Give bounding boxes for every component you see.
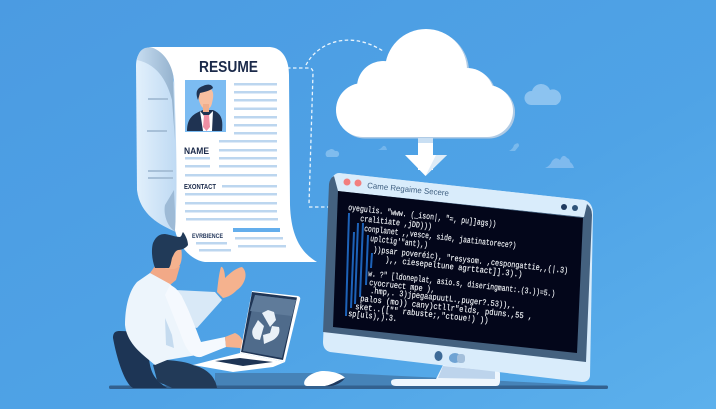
label: EXONTACT: EXONTACT xyxy=(184,184,217,191)
dashed connector: resume to cloud xyxy=(287,40,383,207)
laptop xyxy=(193,291,300,372)
code text: .hmp,. 3)jpegaapuutL.,puger?.53)),. xyxy=(370,286,516,311)
resume photo xyxy=(185,80,226,132)
code text: ),, ciesepeltune agrttact]].3).) xyxy=(385,255,523,280)
hair xyxy=(152,232,188,268)
small background clouds xyxy=(326,84,574,168)
laptop base xyxy=(193,353,285,372)
raised hand xyxy=(217,267,246,298)
laptop keyboard xyxy=(215,358,273,366)
experience highlight bar xyxy=(233,228,280,232)
code text: oyegulis. "www. (_ison|, "=, pu]]ags)) xyxy=(348,203,497,230)
monitor body xyxy=(323,173,593,382)
monitor title bar xyxy=(338,173,586,217)
paper sheet xyxy=(150,47,317,262)
code text xyxy=(348,203,569,326)
mouse xyxy=(304,371,345,386)
code text: palos (mo)) cany)ctllr"elds, pduns.,55 , xyxy=(360,294,533,322)
code text: cralitiate ,jDD))) xyxy=(360,214,432,232)
chair xyxy=(113,331,167,388)
curl of the scroll xyxy=(136,47,180,232)
heading: RESUME: RESUME xyxy=(199,59,258,76)
code text: cyocruect mpe ), xyxy=(369,278,435,295)
monitor stand xyxy=(391,365,500,386)
laptop screen xyxy=(243,295,296,358)
trousers xyxy=(153,360,217,388)
resume body lines xyxy=(185,83,286,252)
recycle icon on laptop xyxy=(252,310,279,344)
window dots xyxy=(561,204,578,211)
label: EVRBIENCE: EVRBIENCE xyxy=(192,233,224,240)
person at laptop xyxy=(113,232,246,388)
window title: Came Regaime Secere xyxy=(367,181,450,198)
code text: conplanet ,,vesce, side, jaatinatorece?) xyxy=(364,224,517,251)
far arm sleeve xyxy=(175,290,222,328)
code text: uplctig'"ant),) xyxy=(370,234,428,250)
desk surface xyxy=(109,373,608,389)
arrow: cloud to monitor xyxy=(405,138,447,176)
window buttons xyxy=(344,178,362,186)
cloud xyxy=(336,29,515,138)
laptop lid xyxy=(240,291,300,362)
near hand xyxy=(225,333,245,353)
black screen xyxy=(333,191,583,353)
resume document xyxy=(136,47,317,262)
label: NAME: NAME xyxy=(184,146,209,156)
monitor xyxy=(323,173,593,386)
code text: sp[uls),).3. xyxy=(348,309,397,324)
face xyxy=(165,245,182,269)
monitor dark frame xyxy=(323,176,592,362)
code gutter bars xyxy=(345,213,373,316)
curl text lines xyxy=(147,98,173,179)
code text: ))psar poveréic), "resysom. ,cespongattie,,(|.3) xyxy=(373,245,569,276)
monitor buttons xyxy=(434,351,465,363)
near sleeve xyxy=(165,285,226,357)
code text: sket..(["" rabuste;,"ctoue!) )) xyxy=(355,302,489,326)
code text: w. ?" [ldoneplat, asio.s, diseringmant:.(3.))=5.) xyxy=(368,269,556,299)
torso shirt xyxy=(125,273,197,365)
neck xyxy=(150,266,180,285)
